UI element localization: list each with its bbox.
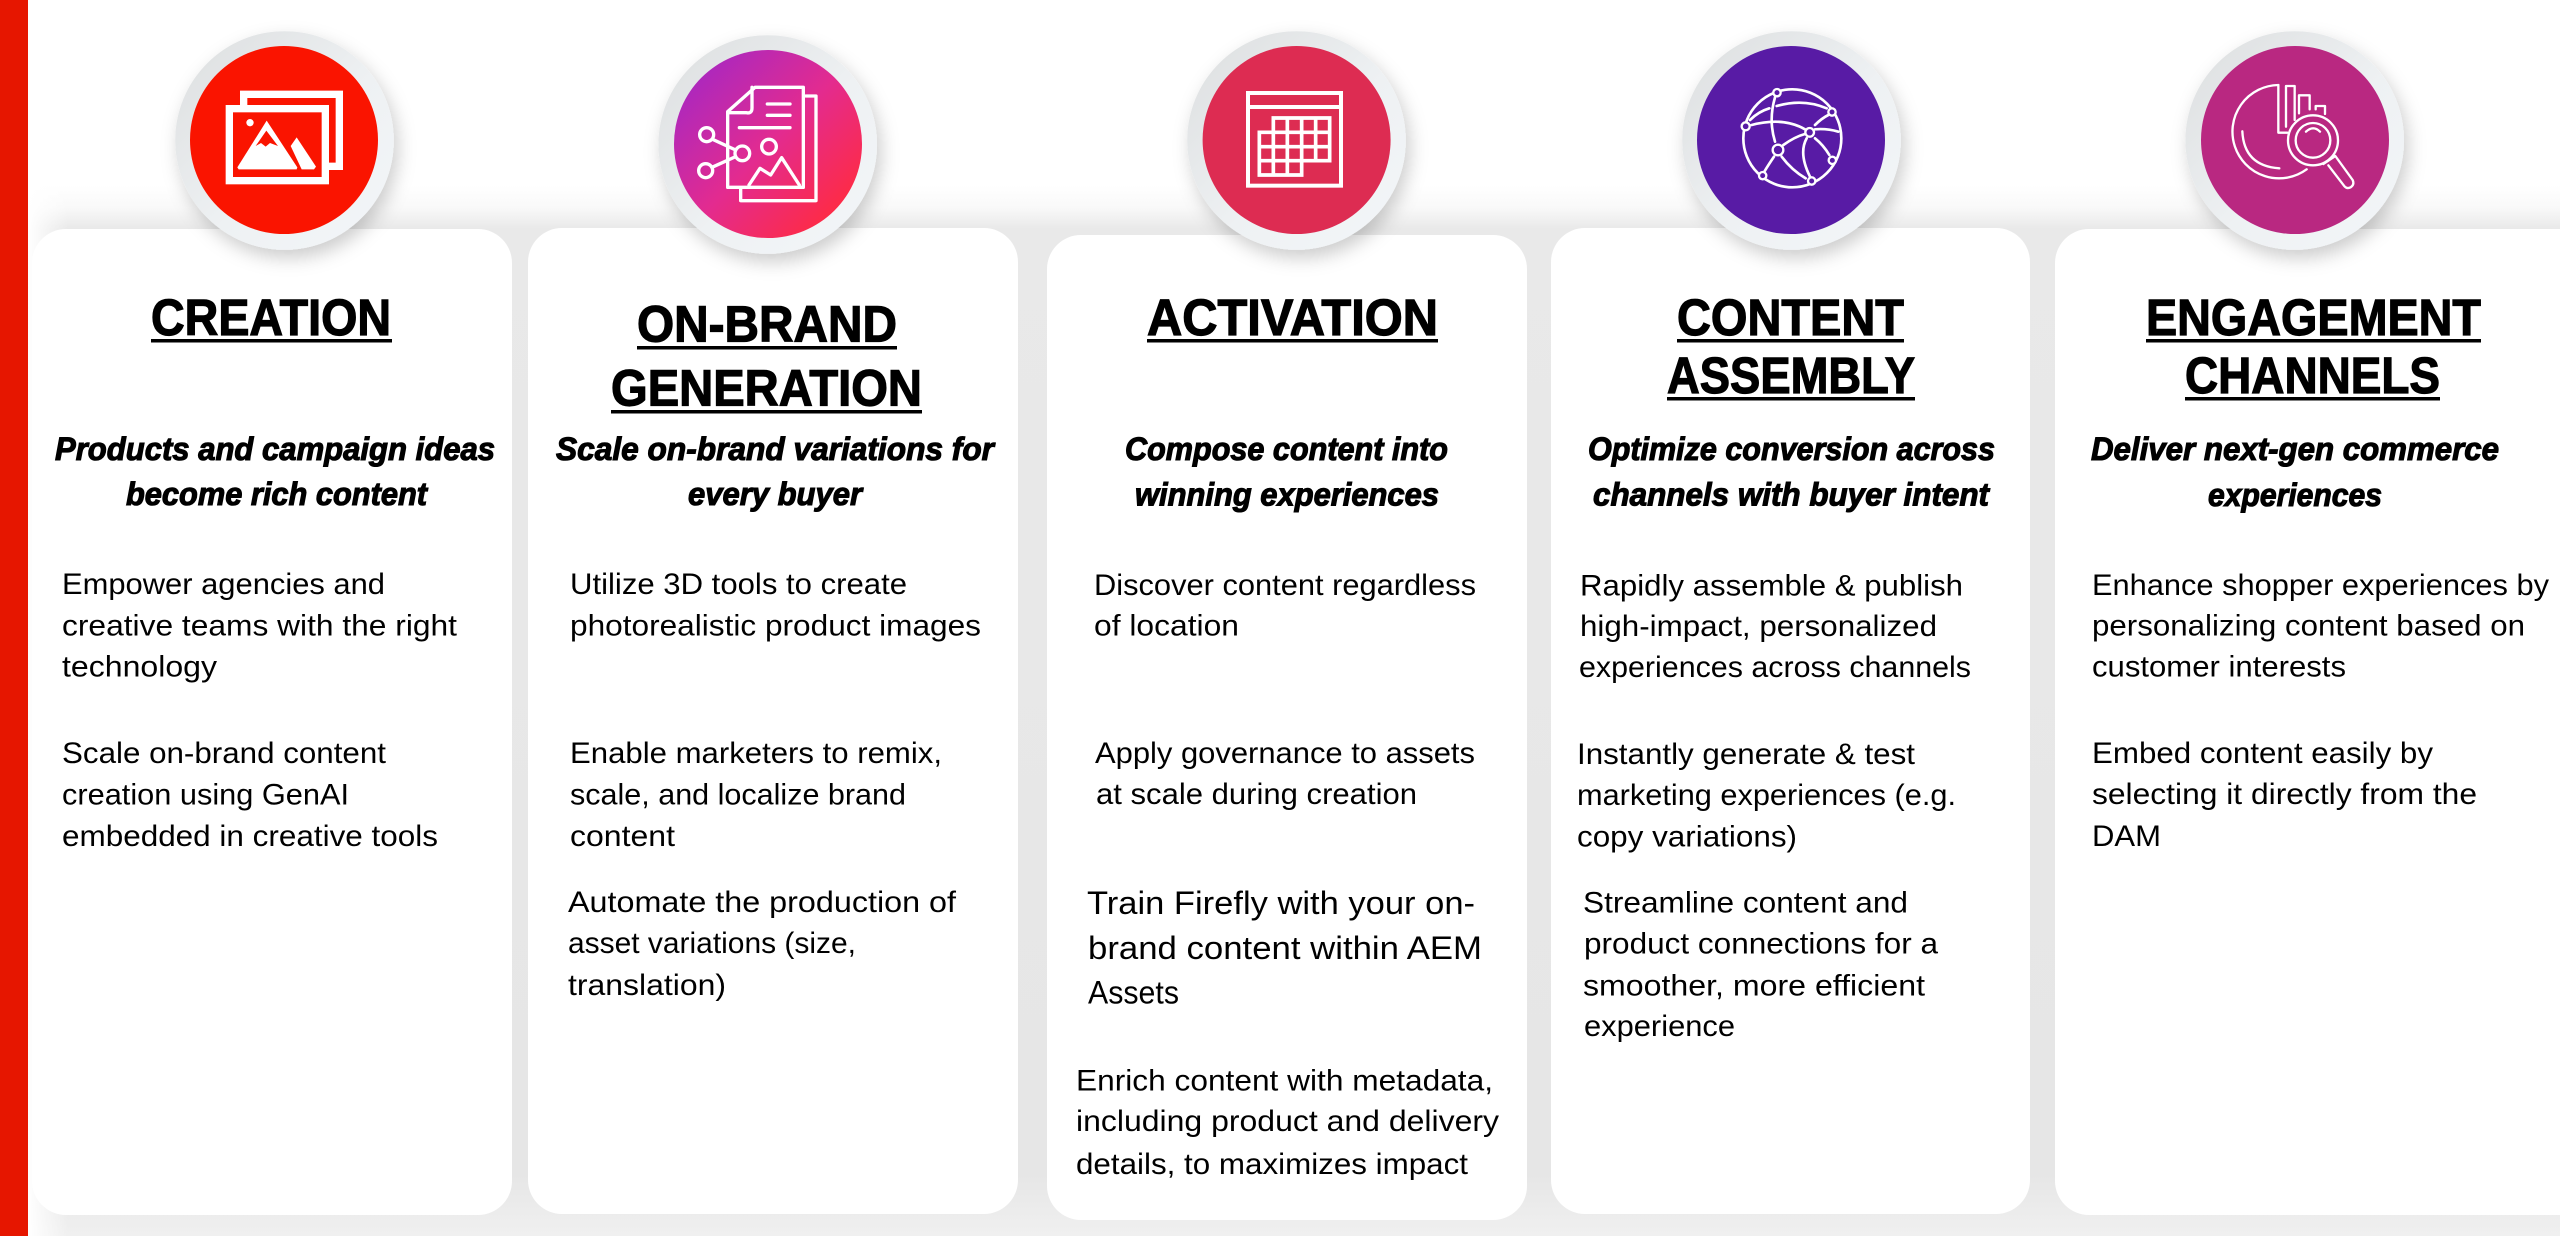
panel: on-brand generation	[528, 35, 1018, 1214]
text: automate production: translation)	[568, 969, 726, 1002]
text: discover content	[1094, 569, 1476, 642]
panel: creation	[32, 31, 512, 1215]
heading: engagement channels: CHANNELS	[2185, 347, 2440, 404]
icon: stacked images	[175, 31, 394, 250]
text: scale on-brand content: Scale on-brand content	[62, 737, 387, 770]
text: enrich content: including product and delivery	[1076, 1105, 1499, 1138]
subheading: activation: Compose content into	[1125, 431, 1448, 467]
panel: engagement channels	[2055, 31, 2560, 1215]
heading: on-brand generation	[611, 296, 922, 416]
subheading: content assembly: Optimize conversion across	[1588, 431, 1995, 467]
text: embed content: DAM	[2092, 820, 2161, 853]
text: empower agencies: technology	[62, 650, 217, 684]
text: empower agencies	[62, 568, 458, 684]
subheading: engagement channels: Deliver next-gen commerce	[2091, 431, 2499, 467]
text: rapidly assemble	[1579, 570, 1971, 684]
text: streamline content: experience	[1584, 1010, 1735, 1043]
heading: creation: CREATION	[151, 289, 391, 346]
text: enable marketers: content	[570, 820, 676, 853]
text: instantly generate: marketing experiences (e.g.	[1577, 779, 1956, 812]
text: embed content	[2092, 737, 2477, 853]
text: streamline content	[1583, 886, 1938, 1043]
text: enable marketers: Enable marketers to remix,	[570, 737, 942, 770]
text: rapidly assemble: high-impact, personalized	[1580, 610, 1937, 643]
heading: on-brand generation: ON-BRAND	[637, 296, 897, 352]
subheading: on-brand generation: every buyer	[688, 476, 863, 512]
text: scale on-brand content: creation using GenAI	[62, 778, 349, 812]
text: train firefly: brand content within AEM	[1088, 930, 1482, 966]
card: content assembly	[1551, 228, 2030, 1214]
text: enable marketers: scale, and localize brand	[570, 778, 906, 812]
text: empower agencies: creative teams with the right	[62, 610, 458, 642]
text: streamline content: Streamline content and	[1583, 886, 1908, 920]
text: streamline content: smoother, more efficient	[1583, 970, 1926, 1002]
card: engagement channels	[2055, 229, 2560, 1215]
text: streamline content: product connections for a	[1584, 928, 1938, 960]
card: creation	[32, 229, 512, 1215]
text: scale on-brand content	[62, 737, 438, 853]
text: apply governance: at scale during creation	[1096, 778, 1417, 811]
subheading: engagement channels	[2091, 431, 2499, 513]
subheading: creation: Products and campaign ideas	[55, 431, 495, 467]
text: enhance shopper: personalizing content based on	[2092, 610, 2525, 642]
text: enhance shopper	[2092, 569, 2549, 684]
text: train firefly: Train Firefly with your on-	[1087, 885, 1475, 921]
subheading: on-brand generation: Scale on-brand variations for	[556, 431, 996, 467]
text: utilize 3D tools: photorealistic product images	[570, 610, 981, 642]
text: scale on-brand content: embedded in creative tools	[62, 820, 438, 853]
text: enrich content	[1076, 1064, 1499, 1181]
text: enrich content: details, to maximizes impact	[1076, 1148, 1469, 1181]
heading: activation: ACTIVATION	[1147, 289, 1438, 346]
text: enrich content: Enrich content with metadata,	[1076, 1064, 1493, 1098]
text: embed content: Embed content easily by	[2092, 737, 2433, 770]
text: rapidly assemble: experiences across channels	[1579, 651, 1971, 684]
text: utilize 3D tools: Utilize 3D tools to create	[570, 568, 907, 601]
subheading: content assembly	[1588, 431, 1995, 512]
panel: activation	[1047, 31, 1527, 1220]
card: activation	[1047, 235, 1527, 1220]
text: instantly generate	[1577, 738, 1956, 854]
text: apply governance: Apply governance to assets	[1095, 737, 1475, 770]
text: instantly generate: copy variations)	[1577, 820, 1797, 854]
text: discover content: Discover content regardless	[1094, 569, 1476, 602]
text: enhance shopper: customer interests	[2092, 650, 2346, 684]
heading: content assembly	[1667, 289, 1915, 404]
heading: engagement channels: ENGAGEMENT	[2146, 289, 2481, 346]
heading: engagement channels	[2146, 289, 2481, 404]
subheading: creation	[55, 431, 495, 512]
text: enable marketers	[570, 737, 942, 853]
card: on-brand generation	[528, 228, 1018, 1214]
text: enhance shopper: Enhance shopper experiences by	[2092, 569, 2549, 602]
subheading: creation: become rich content	[126, 476, 428, 512]
heading: content assembly: ASSEMBLY	[1667, 347, 1915, 404]
text: automate production: asset variations (size,	[568, 927, 856, 960]
text: train firefly: Assets	[1088, 974, 1179, 1010]
text: automate production: Automate the production of	[568, 886, 957, 919]
subheading: on-brand generation	[556, 431, 996, 512]
heading: content assembly: CONTENT	[1677, 289, 1904, 346]
icon: calendar grid	[1187, 31, 1406, 250]
panel: content assembly	[1551, 31, 2030, 1214]
icon: document with share nodes	[658, 35, 877, 254]
text: utilize 3D tools	[570, 568, 981, 642]
text: embed content: selecting it directly from the	[2092, 778, 2477, 811]
text: train firefly	[1087, 885, 1482, 1010]
icon: pie chart with magnifier	[2185, 31, 2404, 250]
subheading: activation	[1125, 431, 1448, 512]
subheading: engagement channels: experiences	[2208, 477, 2382, 513]
text: discover content: of location	[1094, 610, 1239, 642]
heading: on-brand generation: GENERATION	[611, 360, 922, 416]
subheading: content assembly: channels with buyer intent	[1593, 476, 1990, 512]
text: apply governance	[1095, 737, 1475, 811]
text: empower agencies: Empower agencies and	[62, 568, 385, 601]
text: automate production	[568, 886, 957, 1002]
icon: network globe	[1682, 31, 1901, 250]
text: instantly generate: Instantly generate & test	[1577, 738, 1916, 771]
text: rapidly assemble: Rapidly assemble & publish	[1580, 570, 1963, 602]
red side bar	[0, 0, 28, 1236]
subheading: activation: winning experiences	[1135, 476, 1439, 512]
